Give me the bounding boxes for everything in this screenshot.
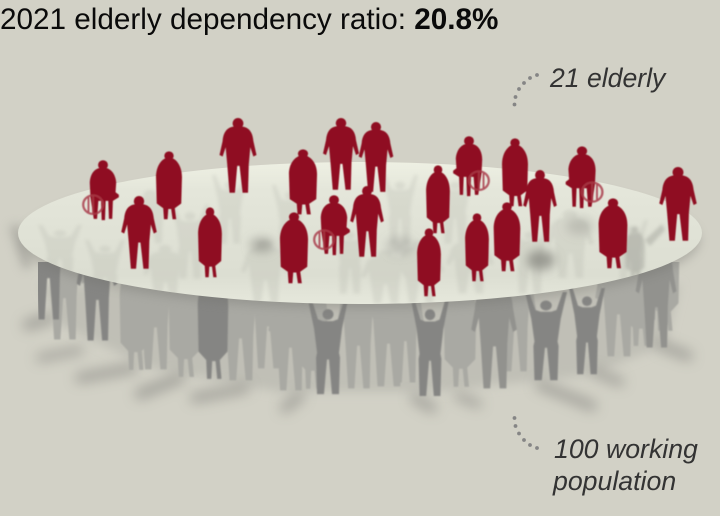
figure: elderly woman 6 [289, 149, 317, 214]
figure: wheelchair user 13 [453, 136, 489, 196]
figure: elderly woman 19 [494, 202, 520, 271]
figure: elderly woman 21 [417, 228, 441, 296]
figure: elderly woman 12 [426, 165, 450, 233]
figure: wheelchair user 10 [314, 195, 350, 255]
figure: elderly woman 18 [599, 198, 627, 268]
ghost reflections on disc [38, 175, 665, 303]
callout: 21 elderly [513, 63, 667, 106]
ground shadows beneath the crowd [14, 225, 688, 408]
figure: elderly woman 20 [465, 213, 489, 281]
dotted leader: elderly [513, 73, 539, 106]
title: 2021 elderly dependency ratio: 20.8% [0, 3, 498, 36]
mid-grey figures [471, 262, 676, 389]
elevated disc [18, 162, 702, 304]
figure: elderly man 4 [323, 118, 359, 190]
figure: elderly man 7 [121, 196, 157, 269]
callout: 100 working population: population [552, 466, 676, 496]
figure: elderly man 15 [523, 170, 557, 242]
figure: wheelchair user 16 [566, 146, 602, 208]
figure: elderly man 11 [350, 186, 384, 257]
disc shadow edge [20, 172, 700, 308]
light back row [52, 262, 680, 391]
soft dark spots [250, 217, 594, 270]
elderly figures [83, 118, 697, 296]
figure: elderly man 17 [659, 167, 697, 241]
figure: elderly woman 14 [502, 138, 528, 206]
figure: wheelchair user 1 [83, 160, 119, 220]
figure: elderly man 3 [220, 118, 256, 193]
figure: elderly woman 9 [280, 212, 308, 283]
figure: elderly man 5 [359, 122, 393, 192]
figure: elderly woman 8 [198, 207, 222, 277]
callout: 100 working population [513, 416, 698, 496]
callout: 21 elderly: 21 elderly [549, 63, 667, 93]
working population crowd below disc [38, 262, 680, 397]
figure: elderly woman 2 [156, 151, 182, 219]
dotted leader: working population [513, 416, 539, 450]
dark front row [38, 262, 605, 397]
callout: 100 working population: 100 working [554, 434, 698, 464]
